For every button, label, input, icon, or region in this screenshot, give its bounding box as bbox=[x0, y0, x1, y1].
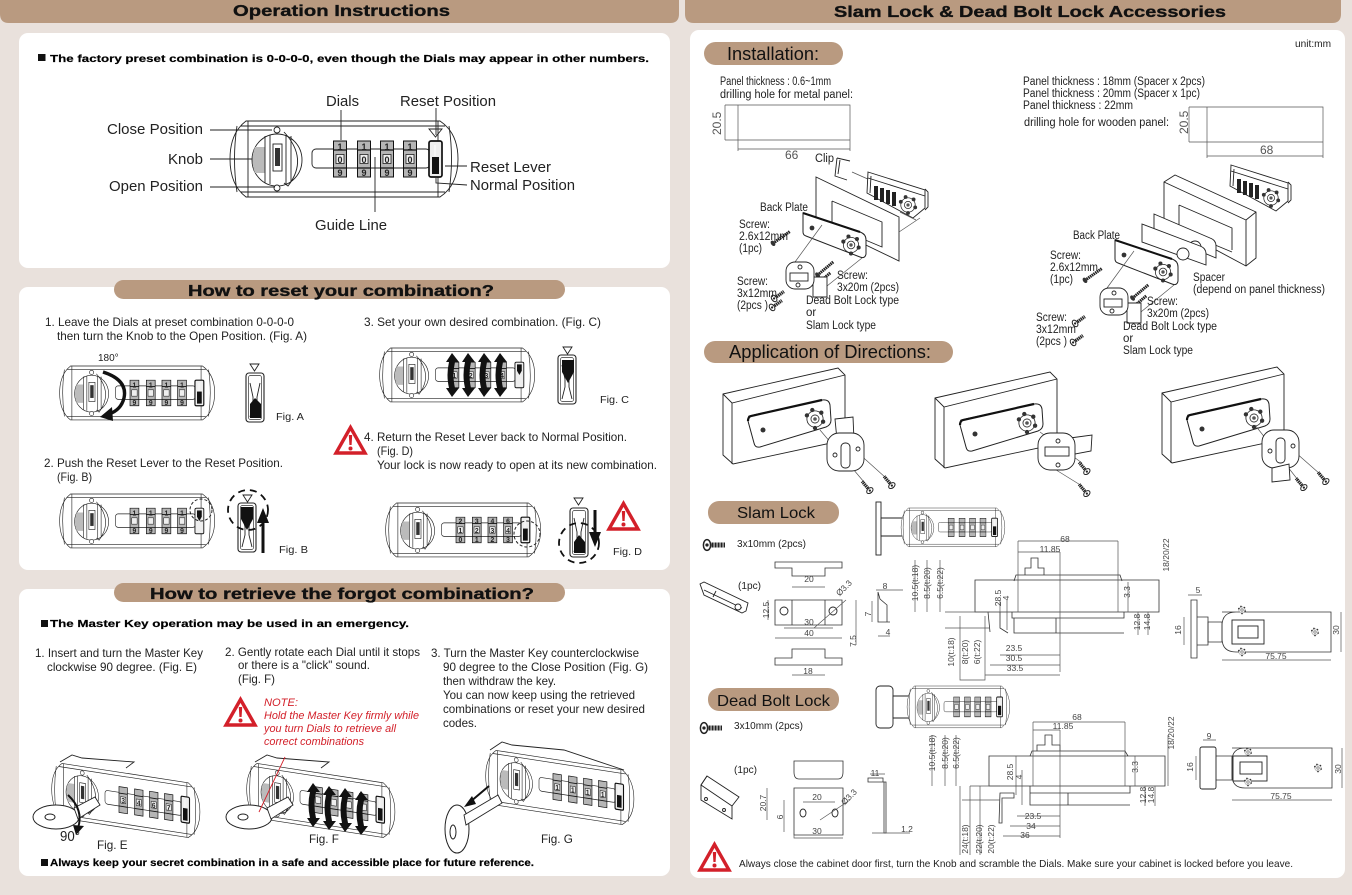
slam side elevation dimensions: 10(t:18) bbox=[946, 637, 956, 667]
wooden panel exploded view: 2.6x12mm bbox=[1050, 262, 1098, 274]
figure D lock: 1234 bbox=[459, 528, 510, 535]
step 2 text bbox=[44, 457, 283, 484]
lock callout labels: Guide Line bbox=[315, 218, 387, 234]
figure E: Fig. E bbox=[97, 839, 128, 852]
dead bolt side elevation dimensions: 24(t:18) bbox=[960, 824, 970, 854]
step 3 text: combinations or reset your new desired bbox=[443, 703, 645, 716]
step 2 text: or there is a "click" sound. bbox=[238, 659, 370, 672]
panel: accessories bbox=[690, 30, 1345, 878]
step 2 text bbox=[225, 646, 420, 686]
red note: NOTE: bbox=[264, 697, 298, 709]
figure E bbox=[33, 755, 200, 852]
wooden panel hole spec: Panel thickness : 20mm (Spacer x 1pc) bbox=[1023, 88, 1200, 100]
slam side elevation dimensions bbox=[910, 534, 1171, 680]
step 3 text: 3. Set your own desired combination. (Fig. C) bbox=[364, 316, 601, 329]
metal panel exploded view: Dead Bolt Lock type bbox=[806, 295, 899, 307]
wooden panel exploded view: Slam Lock type bbox=[1123, 345, 1193, 357]
dead bolt side elevation dimensions: 68 bbox=[1072, 712, 1082, 722]
wooden panel exploded view: 3x12mm bbox=[1036, 324, 1076, 336]
application figure 2 bbox=[935, 372, 1092, 498]
lock callout labels: Reset Position bbox=[400, 94, 496, 110]
lock callout labels: Reset Lever bbox=[470, 160, 551, 176]
dead bolt side elevation dimensions: 22(t:20) bbox=[974, 824, 984, 854]
metal panel exploded view: Screw: bbox=[737, 276, 768, 288]
wooden panel hole spec bbox=[1023, 76, 1323, 158]
step 1 text: then turn the Knob to the Open Position. (Fig. A) bbox=[57, 330, 307, 343]
metal panel exploded view: (1pc) bbox=[739, 243, 762, 255]
wooden panel hole spec: 20.5 bbox=[1177, 110, 1191, 134]
application figure 1 bbox=[723, 368, 896, 495]
figure A lever detail bbox=[246, 364, 304, 423]
step 2 text: 2. Gently rotate each Dial until it stops bbox=[225, 646, 420, 659]
header bar: accessories: Slam Lock & Dead Bolt Lock Accessories bbox=[834, 4, 1226, 21]
step 3 text: You can now keep using the retrieved bbox=[443, 689, 635, 702]
slam strike plate dimensions: 7.5 bbox=[848, 635, 858, 647]
figure G: 1111 bbox=[555, 785, 605, 799]
dead bolt back view dimensions: 16 bbox=[1185, 762, 1195, 772]
slam side elevation dimensions: 33.5 bbox=[1007, 663, 1024, 673]
lock callout labels: Dials bbox=[326, 94, 359, 110]
step 1 text: clockwise 90 degree. (Fig. E) bbox=[47, 661, 197, 674]
dead bolt back view dimensions: 75.75 bbox=[1270, 791, 1292, 801]
metal panel exploded view: 3x20m (2pcs) bbox=[837, 282, 899, 294]
panel: retrieve combination bbox=[19, 583, 670, 876]
warning icon: figure D bbox=[609, 504, 638, 529]
wooden panel exploded view: (2pcs ) bbox=[1036, 336, 1067, 348]
application figure 3 bbox=[1162, 367, 1330, 492]
figure C lever detail: Fig. C bbox=[600, 394, 629, 406]
figure B lever detail: Fig. B bbox=[279, 544, 308, 556]
metal panel exploded view bbox=[737, 153, 928, 332]
slam back view dimensions: 30 bbox=[1331, 625, 1341, 635]
slam side elevation dimensions: 68 bbox=[1060, 534, 1070, 544]
factory preset note: The factory preset combination is 0-0-0-0, even though the Dials may appear in other numbers. bbox=[50, 53, 649, 65]
red note bbox=[263, 697, 419, 748]
figure F bbox=[226, 755, 395, 846]
figure A lever detail: Fig. A bbox=[276, 411, 304, 423]
slam side elevation dimensions: 28.5 bbox=[993, 589, 1003, 606]
lock callout labels: Knob bbox=[168, 152, 203, 168]
slam side elevation dimensions: 8.5(t:20) bbox=[922, 567, 932, 599]
dead bolt strike plate dimensions: 6 bbox=[775, 814, 785, 819]
step 1 text: 1. Insert and turn the Master Key bbox=[35, 647, 203, 660]
dead bolt strike plate dimensions: 11 bbox=[871, 768, 880, 778]
dead bolt side elevation dimensions: 36 bbox=[1020, 830, 1030, 840]
metal panel exploded view: Clip bbox=[815, 153, 834, 165]
step 4 text: 4. Return the Reset Lever back to Normal Position. bbox=[364, 431, 627, 444]
installation heading bbox=[704, 42, 843, 65]
step 2 text: 2. Push the Reset Lever to the Reset Position. bbox=[44, 457, 283, 470]
figure B lock: 9999 bbox=[133, 528, 184, 535]
metal panel exploded view: 3x12mm bbox=[737, 288, 777, 300]
figure D lock bbox=[386, 503, 541, 557]
header bar: operation instructions: Operation Instructions bbox=[233, 3, 450, 20]
dead bolt strike plate dimensions bbox=[758, 761, 913, 838]
slam strike plate dimensions: 7 bbox=[863, 611, 873, 616]
icon: slam lock screw and strike plate: (1pc) bbox=[738, 580, 761, 592]
slam strike plate dimensions: 18 bbox=[803, 666, 813, 676]
wooden panel exploded view: Dead Bolt Lock type bbox=[1123, 321, 1217, 333]
slam lock heading: Slam Lock bbox=[737, 505, 816, 522]
step 4 text: (Fig. D) bbox=[377, 445, 413, 458]
warning icon: step 4 bbox=[336, 428, 365, 453]
red note: you turn Dials to retrieve all bbox=[263, 723, 397, 735]
step 4 text bbox=[364, 431, 657, 472]
slam lock photo view bbox=[876, 502, 1005, 555]
step 4 text: Your lock is now ready to open at its new combination. bbox=[377, 459, 657, 472]
step 3 text: 3. Turn the Master Key counterclockwise bbox=[431, 647, 639, 660]
figure D lock: 2346 bbox=[459, 518, 510, 526]
wooden panel hole spec: 68 bbox=[1260, 143, 1274, 157]
step 2 text: (Fig. B) bbox=[57, 471, 92, 484]
dead bolt strike plate dimensions: 20 bbox=[812, 792, 822, 802]
slam strike plate dimensions: Ø3.3 bbox=[834, 578, 854, 598]
slam back view dimensions: 75.75 bbox=[1265, 651, 1287, 661]
dead bolt back view dimensions: 30 bbox=[1333, 764, 1343, 774]
dead bolt strike plate dimensions: Ø3.3 bbox=[839, 787, 859, 807]
unit label: unit:mm bbox=[1295, 39, 1331, 50]
dead bolt strike plate dimensions: 20.7 bbox=[758, 794, 768, 811]
panel: reset combination bbox=[19, 280, 670, 570]
red note: correct combinations bbox=[264, 736, 364, 748]
wooden panel exploded view: Screw: bbox=[1147, 296, 1178, 308]
dead bolt lock heading: Dead Bolt Lock bbox=[717, 693, 831, 710]
header bar: accessories bbox=[685, 0, 1341, 23]
figure C lock: 1234 bbox=[453, 373, 504, 380]
main lock diagram bbox=[230, 121, 458, 197]
dead bolt side elevation dimensions: 3.3 bbox=[1130, 761, 1140, 773]
wooden panel hole spec: Panel thickness : 22mm bbox=[1023, 100, 1133, 112]
step 3 text: then withdraw the key. bbox=[443, 675, 556, 688]
dead bolt lock heading bbox=[708, 688, 839, 711]
icon: slam lock screw and strike plate: 3x10mm (2pcs) bbox=[737, 538, 806, 550]
slam side elevation dimensions: 8(t:20) bbox=[960, 640, 970, 664]
slam side elevation dimensions: 23.5 bbox=[1006, 643, 1023, 653]
dead bolt side elevation dimensions: 4 bbox=[1014, 774, 1024, 779]
step 3 text: 90 degree to the Close Position (Fig. G) bbox=[443, 661, 648, 674]
metal panel exploded view: Slam Lock type bbox=[806, 320, 876, 332]
icon: dead bolt screw and strike plate bbox=[700, 720, 803, 819]
slam back view dimensions: 16 bbox=[1173, 625, 1183, 635]
section heading: reset: How to reset your combination? bbox=[188, 283, 494, 300]
dead bolt side elevation dimensions: 12.8 bbox=[1138, 786, 1148, 803]
slam side elevation dimensions: 6.5(t:22) bbox=[935, 567, 945, 599]
wooden panel exploded view: Screw: bbox=[1050, 250, 1081, 262]
header bar: operation instructions bbox=[0, 0, 679, 23]
figure G: Fig. G bbox=[541, 833, 573, 846]
slam back view dimensions: 5 bbox=[1196, 585, 1201, 595]
dead bolt side elevation dimensions: 14.8 bbox=[1146, 786, 1156, 803]
wooden panel exploded view: (1pc) bbox=[1050, 274, 1073, 286]
lock callout labels: Open Position bbox=[109, 179, 203, 195]
dead bolt side elevation dimensions: 23.5 bbox=[1025, 811, 1042, 821]
metal panel exploded view: 2.6x12mm bbox=[739, 231, 788, 243]
dead bolt side elevation dimensions: 8.5(t:20) bbox=[940, 737, 950, 769]
slam side elevation dimensions: 30.5 bbox=[1006, 653, 1023, 663]
figure C lever detail bbox=[558, 347, 629, 406]
dead bolt side elevation dimensions bbox=[927, 712, 1176, 855]
figure D label: Fig. D bbox=[613, 546, 642, 558]
section heading: reset bbox=[114, 280, 565, 300]
metal panel hole spec: 20.5 bbox=[710, 111, 724, 135]
slam side elevation dimensions: 10.5(t:18) bbox=[910, 565, 920, 601]
dead bolt side elevation dimensions: 6.5(t:22) bbox=[951, 737, 961, 769]
figure A lock bbox=[60, 353, 215, 421]
wooden panel exploded view bbox=[1036, 165, 1325, 357]
wooden panel exploded view: or bbox=[1123, 333, 1133, 345]
dead bolt strike plate dimensions: 1.2 bbox=[901, 824, 913, 834]
dead bolt back view dimensions: 9 bbox=[1207, 731, 1212, 741]
warning icon: footer bbox=[700, 844, 729, 870]
metal panel exploded view: Screw: bbox=[837, 270, 868, 282]
dead bolt back view dimensions bbox=[1185, 731, 1343, 801]
step 3 text: codes. bbox=[443, 717, 477, 730]
slam side elevation dimensions: 12.8 bbox=[1132, 613, 1142, 630]
metal panel exploded view: or bbox=[806, 307, 816, 319]
slam strike plate dimensions: 30 bbox=[804, 617, 814, 627]
wooden panel exploded view: 3x20m (2pcs) bbox=[1147, 308, 1209, 320]
dead bolt strike plate dimensions: 30 bbox=[812, 826, 822, 836]
main lock diagram: 0000 bbox=[337, 155, 413, 165]
slam strike plate dimensions: 8 bbox=[883, 581, 888, 591]
icon: slam lock screw and strike plate bbox=[700, 538, 806, 613]
slam side elevation dimensions: 4 bbox=[1001, 595, 1011, 600]
figure F: Fig. F bbox=[309, 833, 339, 846]
wooden panel exploded view: (depend on panel thickness) bbox=[1193, 284, 1325, 296]
warning icon: note bbox=[226, 700, 255, 725]
figure A lock: 9999 bbox=[133, 400, 184, 407]
dead bolt side elevation dimensions: 10.5(t:18) bbox=[927, 735, 937, 771]
slam back view dimensions bbox=[1173, 585, 1341, 661]
metal panel hole spec bbox=[710, 76, 853, 162]
figure D lever detail bbox=[559, 498, 601, 563]
dead bolt side elevation dimensions: 18/20/22 bbox=[1166, 716, 1176, 750]
master key note: The Master Key operation may be used in an emergency. bbox=[50, 618, 409, 630]
figure B lock: 1111 bbox=[133, 510, 184, 517]
wooden panel exploded view: Screw: bbox=[1036, 312, 1067, 324]
section heading: retrieve bbox=[114, 583, 565, 603]
red note: Hold the Master Key firmly while bbox=[264, 710, 419, 722]
slam strike plate dimensions: 4 bbox=[886, 627, 891, 637]
wooden panel exploded view: Spacer bbox=[1193, 272, 1225, 284]
slam side elevation dimensions: 18/20/22 bbox=[1161, 538, 1171, 572]
slam strike plate dimensions: 20 bbox=[804, 574, 814, 584]
figure B lever detail bbox=[228, 490, 308, 556]
figure E: 90° bbox=[60, 829, 80, 845]
icon: dead bolt screw and strike plate: (1pc) bbox=[734, 764, 757, 776]
installation heading: Installation: bbox=[727, 44, 819, 64]
wooden panel exploded view: Back Plate bbox=[1073, 230, 1120, 242]
icon: dead bolt screw and strike plate: 3x10mm (2pcs) bbox=[734, 720, 803, 732]
figure C lock bbox=[380, 348, 535, 402]
metal panel hole spec: Panel thickness : 0.6~1mm bbox=[720, 76, 831, 88]
wooden panel hole spec: Panel thickness : 18mm (Spacer x 2pcs) bbox=[1023, 76, 1205, 88]
slam side elevation dimensions: 3.3 bbox=[1122, 586, 1132, 598]
application heading: Application of Directions: bbox=[729, 342, 931, 362]
lock callout labels bbox=[107, 94, 575, 234]
step 1 text bbox=[45, 316, 307, 343]
wooden panel hole spec: drilling hole for wooden panel: bbox=[1024, 117, 1169, 129]
step 2 text: (Fig. F) bbox=[238, 673, 275, 686]
main lock diagram: 1111 bbox=[337, 142, 413, 152]
metal panel hole spec: drilling hole for metal panel: bbox=[720, 89, 853, 101]
metal panel exploded view: (2pcs ) bbox=[737, 300, 768, 312]
step 1 text bbox=[35, 647, 203, 674]
lock callout labels: Close Position bbox=[107, 122, 203, 138]
dead bolt side elevation dimensions: 11.85 bbox=[1053, 721, 1074, 731]
figure D lock: 0123 bbox=[459, 537, 510, 544]
dead bolt side elevation dimensions: 20(t:22) bbox=[986, 824, 996, 854]
step 3 text bbox=[431, 647, 648, 730]
slam lock heading bbox=[708, 501, 839, 524]
figure E: 3467 bbox=[121, 798, 171, 812]
metal panel exploded view: Screw: bbox=[739, 219, 770, 231]
footer warning text: Always close the cabinet door first, turn the Knob and scramble the Dials. Make sure your cabinet is locked before you leave. bbox=[739, 858, 1293, 870]
metal panel hole spec: 66 bbox=[785, 148, 799, 162]
dead bolt side elevation dimensions: 34 bbox=[1026, 821, 1036, 831]
figure A lock: 1111 bbox=[133, 382, 184, 389]
figure B lock bbox=[60, 494, 215, 548]
figure G bbox=[445, 742, 634, 853]
dead bolt side elevation dimensions: 28.5 bbox=[1005, 763, 1015, 780]
secret combination note: Always keep your secret combination in a safe and accessible place for future reference. bbox=[50, 857, 534, 869]
slam strike plate dimensions: 12.5 bbox=[761, 601, 771, 618]
slam strike plate dimensions: 40 bbox=[804, 628, 814, 638]
panel: lock overview bbox=[19, 33, 670, 268]
main lock diagram: 9999 bbox=[337, 168, 413, 178]
lock callout labels: Normal Position bbox=[470, 178, 575, 194]
step 1 text: 1. Leave the Dials at preset combination 0-0-0-0 bbox=[45, 316, 294, 329]
slam side elevation dimensions: 6(t:22) bbox=[972, 640, 982, 664]
slam side elevation dimensions: 14.8 bbox=[1142, 613, 1152, 630]
figure A lock: 180° bbox=[98, 353, 119, 364]
section heading: retrieve: How to retrieve the forgot combination? bbox=[150, 586, 534, 603]
dead bolt photo view bbox=[876, 686, 1010, 728]
metal panel exploded view: Back Plate bbox=[760, 202, 808, 214]
slam strike plate dimensions bbox=[761, 562, 903, 676]
slam side elevation dimensions: 11.85 bbox=[1040, 544, 1061, 554]
